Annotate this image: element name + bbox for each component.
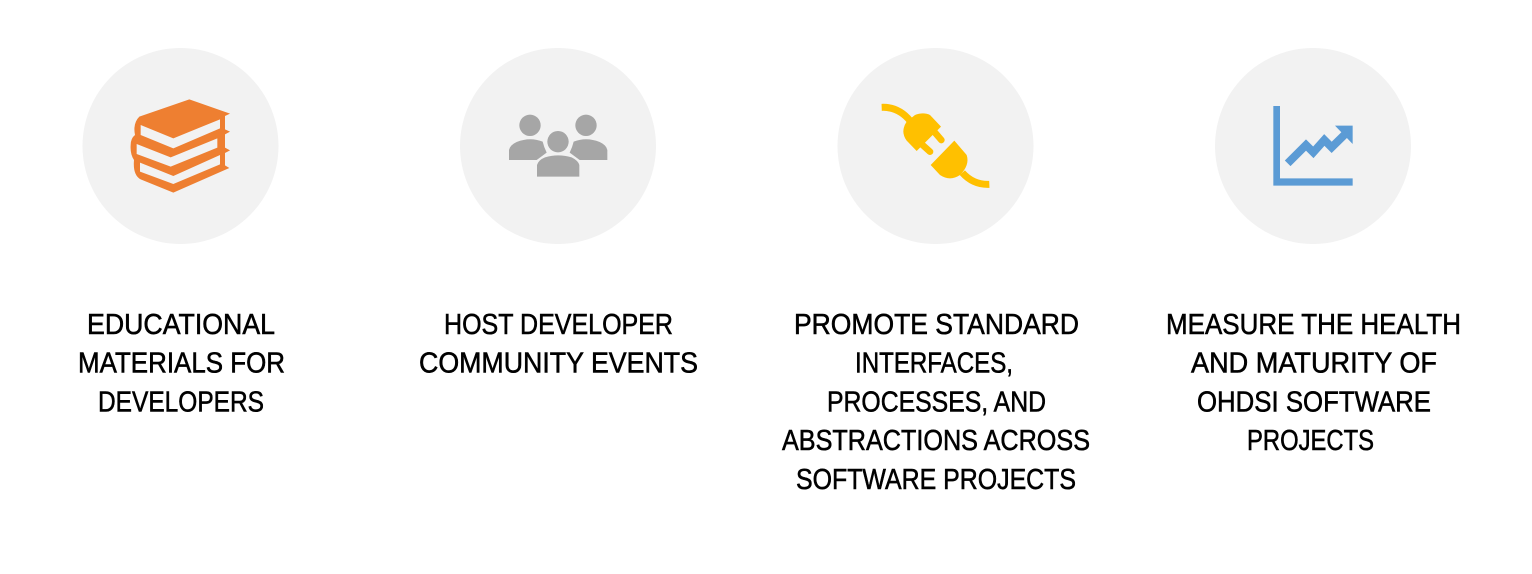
text: measure the health and maturity: OHDSI SOFTWARE [1197,385,1431,417]
icon circle: people background [460,48,656,244]
text: host developer community events: HOST DEVELOPER [444,308,673,340]
icon: group of people [509,115,607,177]
text: promote standard interfaces: PROCESSES, AND [827,385,1046,417]
icon: plug and socket [882,107,989,184]
text: educational materials for developers: DEVELOPERS [98,385,264,417]
icon: rising line chart [1273,106,1353,186]
icon circle: books background [82,48,278,244]
text: measure the health and maturity: PROJECTS [1247,424,1374,456]
text: measure the health and maturity [1166,308,1461,456]
text: host developer community events [419,308,698,379]
text: promote standard interfaces [782,308,1090,495]
text: measure the health and maturity: AND MATURITY OF [1191,347,1437,379]
text: promote standard interfaces: INTERFACES, [855,347,1013,379]
icon: stack of books [131,99,230,193]
text: promote standard interfaces: SOFTWARE PROJECTS [796,463,1076,495]
text: educational materials for developers: EDUCATIONAL [87,308,275,340]
panel: developer community events [419,48,698,379]
icon circle: plug background [838,48,1034,244]
icon circle: chart background [1215,48,1411,244]
text: measure the health and maturity: MEASURE THE HEALTH [1166,308,1461,340]
text: promote standard interfaces: ABSTRACTIONS ACROSS [782,424,1090,456]
text: educational materials for developers: MATERIALS FOR [78,347,285,379]
text: educational materials for developers [78,308,285,417]
panel: standard interfaces [782,48,1090,495]
panel: health and maturity [1166,48,1461,456]
text: host developer community events: COMMUNITY EVENTS [419,347,698,379]
text: promote standard interfaces: PROMOTE STANDARD [794,308,1079,340]
panel: educational materials [78,48,285,417]
